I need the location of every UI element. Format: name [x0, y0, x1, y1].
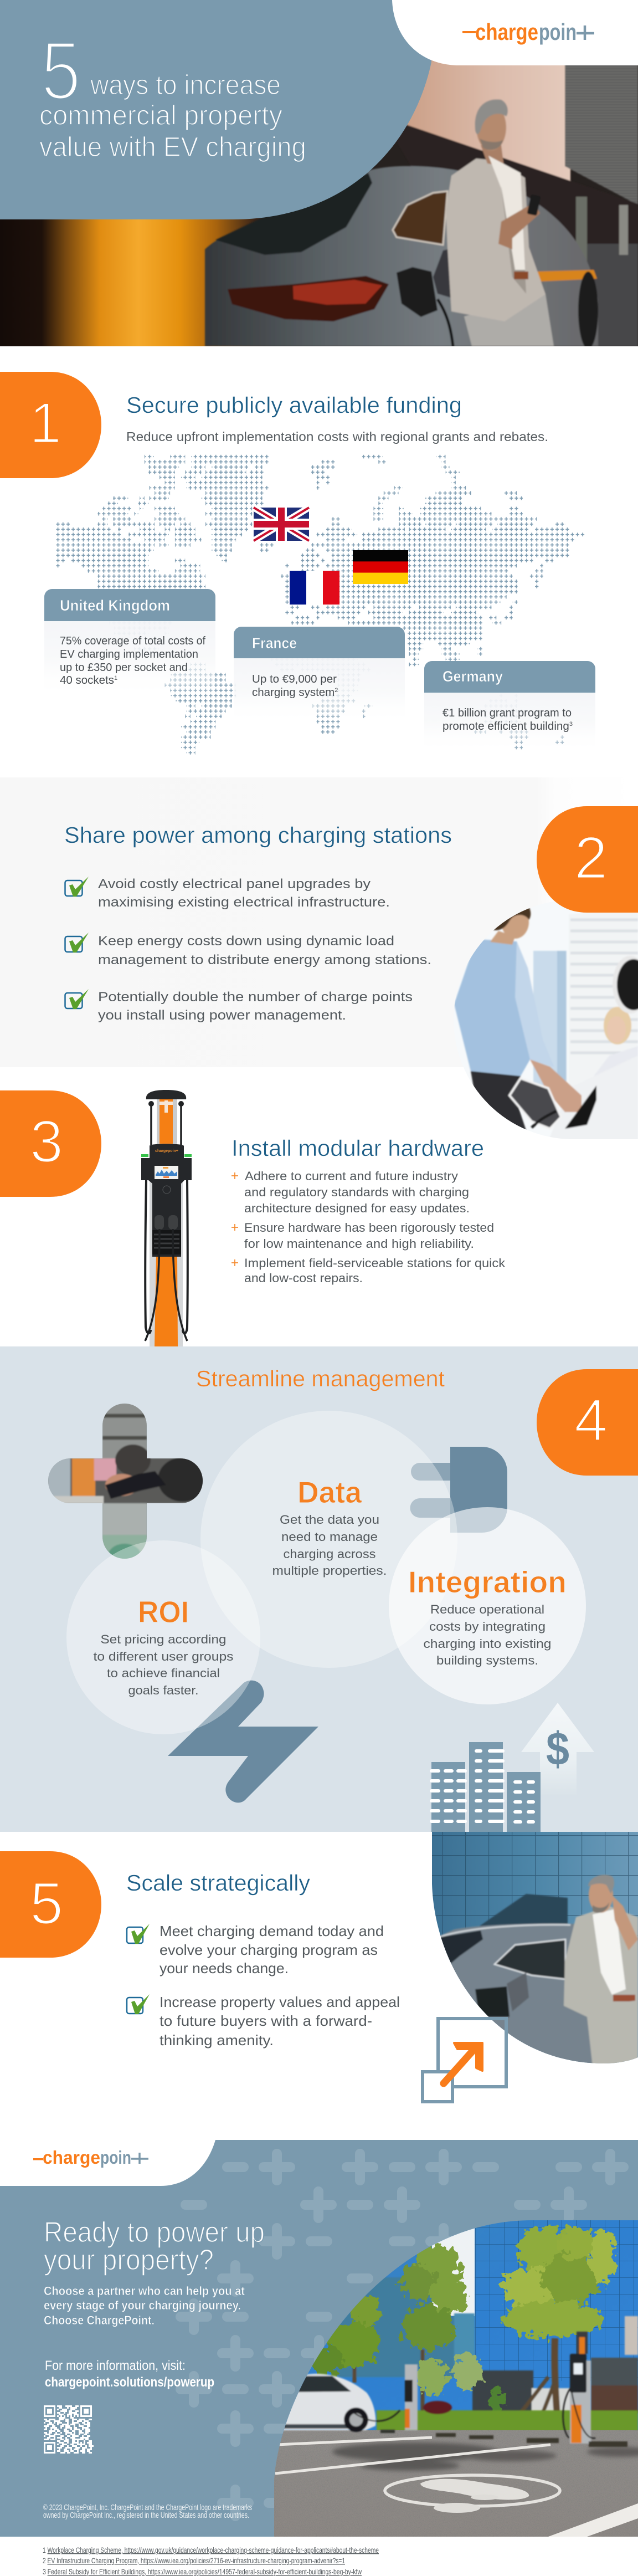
text: ROI — [93, 1595, 234, 1697]
card: United Kingdom: 1 — [114, 675, 117, 682]
heading 2: Share power among charging stations — [64, 822, 452, 848]
badge 3 — [0, 1090, 101, 1197]
card: France: 2 — [335, 687, 338, 694]
item: avoid panel upgrades — [65, 877, 390, 910]
charging station — [141, 1090, 192, 1346]
photo: man plugging in car — [449, 898, 638, 1141]
footnotes: 1 Workplace Charging Scheme, https://www.gov.uk/guidance/workplace-charging-scheme-guidance-for-applicants#about-the-scheme — [43, 2546, 379, 2554]
flag: United Kingdom — [254, 508, 309, 541]
card: Germany: promote efficient building — [443, 720, 569, 733]
item: increase property values — [127, 1994, 400, 2048]
card: Germany — [424, 661, 595, 754]
text: integration: Integration — [408, 1565, 567, 1599]
item: double charge points: Potentially double the number of charge points — [98, 990, 413, 1005]
footnotes: 2 EV Infrastructure Charging Program, https://www.iea.org/policies/2716-ev-infrastructure-charging-program-advenir?s=1 — [43, 2556, 345, 2565]
text: integration: Reduce operational — [430, 1602, 544, 1616]
footer logo tab — [0, 2140, 215, 2186]
text: integration: charging into existing — [423, 1637, 552, 1651]
bullets: modular hardware: Ensure hardware has been rigorously tested — [244, 1221, 494, 1235]
heading: ready to power up: your property? — [44, 2244, 214, 2276]
heading 5: Scale strategically — [126, 1870, 310, 1896]
photo: man with phone at car — [426, 1832, 638, 2067]
item: meet charging demand: your needs change. — [160, 1960, 289, 1976]
item: avoid panel upgrades: Avoid costly electrical panel upgrades by — [98, 877, 371, 892]
flag: Germany — [353, 550, 408, 584]
heading: ready to power up: Ready to power up — [44, 2216, 265, 2249]
logo: chargepoint — [462, 19, 594, 45]
icon: rising value arrow with dollar — [521, 1703, 594, 1795]
circle: integration — [389, 1507, 586, 1704]
bullets: modular hardware: architecture designed for easy updates. — [244, 1201, 470, 1215]
item: increase property values: thinking amenity. — [160, 2032, 274, 2048]
item: increase property values: to future buyers with a forward- — [160, 2012, 372, 2029]
text: ROI: to achieve financial — [107, 1666, 220, 1680]
footer logo: chargepoint: charge — [43, 2147, 100, 2168]
badge 5 — [0, 1851, 101, 1958]
text: data: Data — [297, 1475, 362, 1509]
icon: lightning bolt — [168, 1681, 318, 1802]
card: Germany: Germany — [443, 668, 503, 685]
badge 2: 2 — [574, 824, 608, 891]
badge 2 — [537, 806, 638, 913]
charging station: chargepoin+ — [155, 1149, 178, 1153]
copyright text: owned by ChargePoint Inc., registered in the United States and other countries. — [43, 2511, 249, 2520]
hero title: 5 — [41, 24, 81, 117]
hero title — [39, 24, 306, 162]
hero title: ways to increase — [90, 69, 281, 100]
copyright text — [43, 2503, 252, 2520]
card: France: Up to €9,000 per — [252, 673, 337, 685]
badge 5: 5 — [30, 1870, 63, 1937]
card: United Kingdom: up to £350 per socket and — [60, 661, 188, 674]
bullets: modular hardware: Implement field-serviceable stations for quick — [244, 1256, 506, 1270]
subheading 1: Reduce upfront implementation costs with regional grants and rebates. — [126, 429, 548, 444]
bullets: modular hardware: for low maintenance and high reliability. — [244, 1237, 474, 1251]
badge 4: 4 — [574, 1386, 608, 1453]
logo: chargepoint: poin — [539, 19, 577, 45]
circle: ROI — [66, 1540, 260, 1734]
card: United Kingdom: EV charging implementation — [60, 648, 198, 660]
hero title: commercial property — [39, 100, 282, 131]
text: integration — [408, 1565, 567, 1667]
footer logo: chargepoint: poin — [100, 2147, 131, 2168]
text: choose a partner: Choose a partner who can help you at — [44, 2284, 245, 2298]
bullets: modular hardware: Adhere to current and future industry — [245, 1169, 459, 1183]
logo: chargepoint: charge — [475, 19, 538, 45]
icon: buildings — [431, 1742, 541, 1832]
card: United Kingdom — [44, 589, 215, 699]
text: data: multiple properties. — [272, 1564, 387, 1578]
heading: ready to power up — [44, 2216, 265, 2276]
QR code — [44, 2405, 94, 2454]
decorative plus and minus pattern — [181, 2154, 624, 2516]
item: dynamic load management — [65, 933, 431, 967]
icon: scale up arrow in squares — [423, 2019, 506, 2102]
hero blue panel — [0, 0, 431, 219]
text: integration: costs by integrating — [429, 1620, 546, 1633]
text: more information link: chargepoint.solutions/powerup — [45, 2375, 214, 2390]
text: data: Get the data you — [280, 1513, 379, 1527]
text: choose a partner — [44, 2284, 245, 2327]
text: choose a partner: every stage of your charging journey. — [44, 2298, 241, 2312]
text: ROI: Set pricing according — [101, 1632, 226, 1646]
badge 4 — [537, 1369, 638, 1476]
circle: data — [200, 1411, 457, 1668]
heading 3: Install modular hardware — [231, 1135, 484, 1161]
flag: France — [290, 571, 339, 605]
world map of plus signs — [55, 457, 586, 752]
badge 1 — [0, 372, 101, 478]
text: ROI: goals faster. — [128, 1683, 198, 1697]
card: France: France — [252, 634, 297, 652]
text: data: need to manage — [281, 1530, 378, 1544]
text: data — [272, 1475, 387, 1578]
text: ROI: ROI — [138, 1595, 189, 1629]
heading 4: Streamline management — [196, 1366, 445, 1391]
panel: streamline management background — [0, 1346, 638, 1832]
text: more information link — [45, 2358, 214, 2390]
badge 1: 1 — [29, 391, 61, 455]
photo in plus shape: hand with charger — [48, 1404, 208, 1568]
item: avoid panel upgrades: maximising existing electrical infrastructure. — [98, 895, 390, 910]
text: ROI: to different user groups — [93, 1650, 234, 1663]
icon: plug — [410, 1447, 507, 1533]
heading 1: Secure publicly available funding — [126, 392, 462, 418]
footnotes: 3 Federal Subsidy for Efficient Buildings, https://www.iea.org/policies/14957-federal-subsidy-for-efficient-buildings-beg-by-kfw — [43, 2567, 362, 2576]
text: data: charging across — [284, 1547, 375, 1561]
item: meet charging demand: Meet charging demand today and — [160, 1923, 384, 1939]
card: France — [234, 627, 405, 725]
card: Germany: €1 billion grant program to — [443, 706, 572, 719]
hero photo: man beside charging car — [0, 60, 638, 346]
bullets: modular hardware — [231, 1169, 506, 1285]
item: meet charging demand — [127, 1923, 384, 1976]
text: choose a partner: Choose ChargePoint. — [44, 2313, 155, 2327]
bullets: modular hardware: and regulatory standards with charging — [244, 1185, 469, 1199]
panel: call to action background — [0, 2140, 638, 2537]
item: double charge points: you install using power management. — [98, 1008, 346, 1023]
hero logo tab — [392, 0, 638, 65]
item: double charge points — [65, 989, 413, 1023]
bullets: modular hardware: and low-cost repairs. — [244, 1271, 363, 1285]
item: increase property values: Increase property values and appeal — [160, 1994, 400, 2010]
footnotes — [43, 2546, 379, 2576]
item: meet charging demand: evolve your charging program as — [160, 1942, 378, 1958]
copyright text: © 2023 ChargePoint, Inc. ChargePoint and the ChargePoint logo are trademarks — [43, 2503, 252, 2512]
item: dynamic load management: Keep energy costs down using dynamic load — [98, 934, 394, 949]
card: United Kingdom: 40 sockets — [60, 674, 114, 687]
item: dynamic load management: management to distribute energy among stations. — [98, 952, 431, 967]
card: United Kingdom: 75% coverage of total costs of — [60, 634, 205, 647]
photo: parking with charging stations — [271, 2216, 638, 2538]
icon: rising value arrow with dollar: $ — [546, 1723, 569, 1775]
panel: share power background — [0, 777, 638, 1067]
footer logo: chargepoint — [33, 2147, 148, 2168]
card: France: charging system — [252, 686, 335, 699]
text: more information link: For more information, visit: — [45, 2358, 186, 2373]
card: United Kingdom: United Kingdom — [60, 597, 170, 614]
hero title: value with EV charging — [39, 131, 306, 162]
card: Germany: 3 — [569, 721, 573, 728]
badge 3: 3 — [30, 1108, 63, 1175]
text: integration: building systems. — [436, 1653, 538, 1667]
